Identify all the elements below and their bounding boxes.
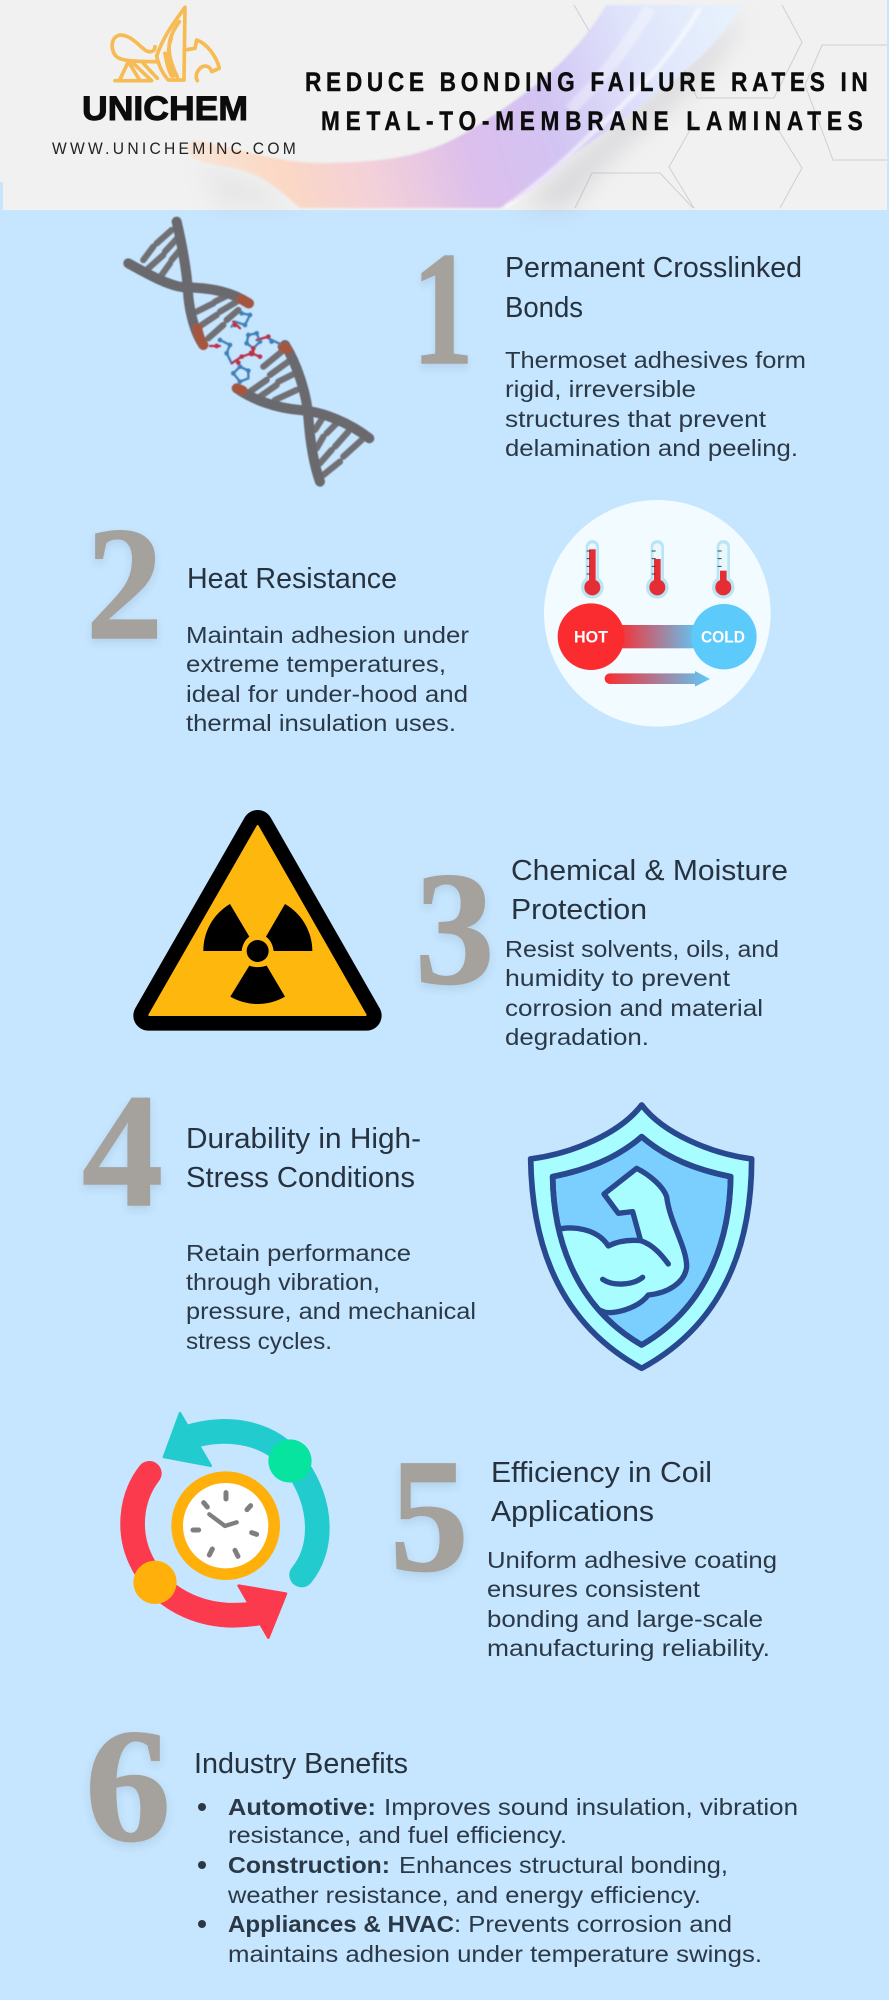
company name: UNICHEM xyxy=(82,90,248,128)
benefits list: Enhances structural bonding, xyxy=(399,1852,728,1878)
body text: corrosion and material xyxy=(505,995,763,1021)
panel: step 4 durability xyxy=(82,1098,754,1372)
panel: step 3 chemical and moisture protection xyxy=(148,825,788,1050)
logo mark: griffin xyxy=(112,7,219,81)
body text: Resist solvents, oils, and xyxy=(505,936,779,962)
heading: Efficiency in Coil xyxy=(491,1457,712,1489)
heading: Durability in High- xyxy=(186,1123,421,1155)
panel: step 1 permanent crosslinked bonds xyxy=(128,220,806,482)
body text: manufacturing reliability. xyxy=(487,1635,770,1661)
body text: ideal for under-hood and xyxy=(186,681,468,707)
title: METAL-TO-MEMBRANE LAMINATES xyxy=(321,106,863,136)
body text: pressure, and mechanical xyxy=(186,1298,476,1324)
body text: thermal insulation uses. xyxy=(186,710,456,736)
panel: step 6 industry benefits xyxy=(85,1696,798,1967)
number 4: 4 xyxy=(82,1062,163,1241)
heading: Chemical & Moisture xyxy=(511,855,788,887)
body text: bonding and large-scale xyxy=(487,1606,763,1632)
benefits list: Construction: xyxy=(228,1852,390,1878)
heading xyxy=(491,1457,712,1528)
body text xyxy=(505,936,779,1050)
label cold: COLD xyxy=(701,628,745,647)
icon: clock with cycle arrows xyxy=(133,1413,317,1638)
number 5: 5 xyxy=(390,1426,469,1606)
hot to cold bar xyxy=(617,625,700,648)
heading xyxy=(511,855,788,926)
body text: delamination and peeling. xyxy=(505,435,798,461)
body text: stress cycles. xyxy=(186,1328,332,1354)
benefits list xyxy=(198,1794,798,1967)
icon: hazard triangle xyxy=(148,825,367,1016)
title xyxy=(305,67,868,136)
body text: Uniform adhesive coating xyxy=(487,1547,777,1573)
body text: rigid, irreversible xyxy=(505,376,696,402)
arrow xyxy=(605,671,710,687)
icon: shield with flexed arm xyxy=(531,1105,752,1368)
body text: Thermoset adhesives form xyxy=(505,347,806,373)
heading: Heat Resistance xyxy=(187,563,397,595)
body text xyxy=(505,347,806,461)
heading: Stress Conditions xyxy=(186,1162,415,1194)
body text: Retain performance xyxy=(186,1240,411,1266)
number 3: 3 xyxy=(415,839,494,1018)
body text xyxy=(186,1240,476,1354)
body text: extreme temperatures, xyxy=(186,651,446,677)
benefits list: weather resistance, and energy efficiency. xyxy=(227,1882,701,1908)
benefits list: Automotive: xyxy=(228,1794,376,1820)
body text: ensures consistent xyxy=(487,1576,701,1602)
heading: Industry Benefits xyxy=(194,1748,408,1780)
heading: Bonds xyxy=(505,292,583,324)
benefits list: resistance, and fuel efficiency. xyxy=(228,1822,567,1848)
label hot: HOT xyxy=(574,628,608,647)
heading: Permanent Crosslinked xyxy=(505,252,802,284)
body text: structures that prevent xyxy=(505,406,767,432)
heading: Applications xyxy=(491,1496,654,1528)
body text xyxy=(487,1547,777,1661)
benefits list: Improves sound insulation, vibration xyxy=(384,1794,798,1820)
icon: hot to cold thermometers xyxy=(544,500,771,727)
liquid swoosh xyxy=(188,5,745,208)
body text: through vibration, xyxy=(186,1269,380,1295)
panel: step 2 heat resistance xyxy=(86,494,771,736)
body text: Maintain adhesion under xyxy=(186,622,469,648)
icon: DNA helix xyxy=(128,222,369,482)
website: WWW.UNICHEMINC.COM xyxy=(52,139,296,158)
hexagon line pattern xyxy=(574,5,887,208)
body text xyxy=(186,622,469,736)
header banner xyxy=(0,0,887,210)
title: REDUCE BONDING FAILURE RATES IN xyxy=(305,67,868,97)
benefits list: : Prevents corrosion and xyxy=(454,1911,732,1937)
body text: degradation. xyxy=(505,1024,649,1050)
number 2: 2 xyxy=(86,494,163,674)
number 6: 6 xyxy=(85,1696,171,1876)
body text: humidity to prevent xyxy=(505,965,731,991)
heading xyxy=(505,252,802,324)
benefits list: maintains adhesion under temperature swings. xyxy=(228,1941,762,1967)
heading: Protection xyxy=(511,894,647,926)
heading xyxy=(186,1123,421,1194)
panel: step 5 efficiency in coil applications xyxy=(133,1413,777,1661)
thermometers xyxy=(581,540,735,599)
number 1: 1 xyxy=(412,220,474,399)
benefits list: Appliances & HVAC xyxy=(228,1911,454,1937)
